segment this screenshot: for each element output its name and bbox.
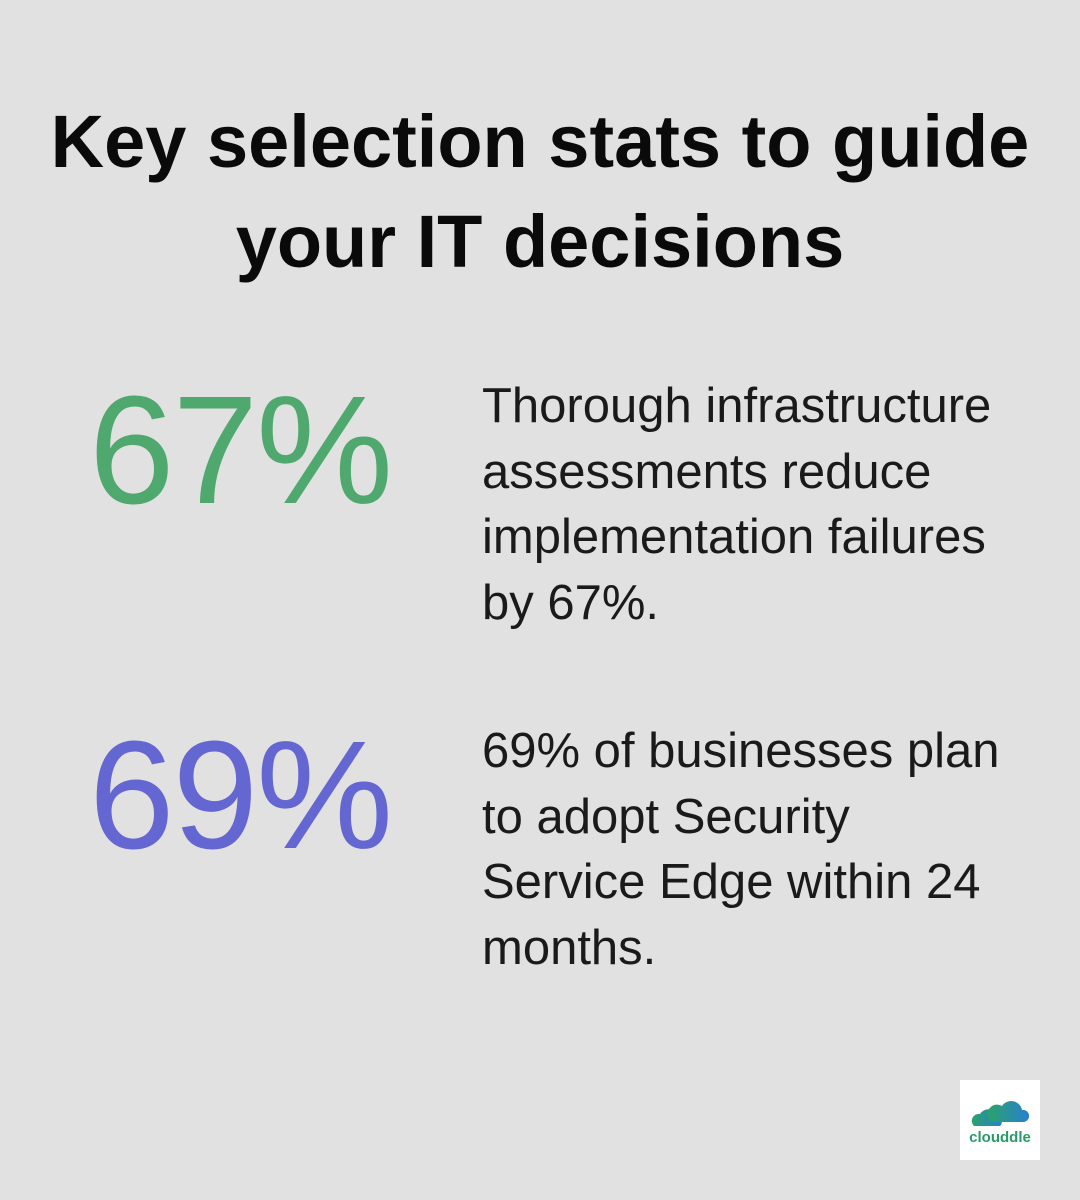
stat text 2: 69% of businesses plan to adopt Security Service Edge within 24 months. [482,724,1000,974]
title [51,100,1029,283]
title: your IT decisions [236,200,844,283]
logo: clouddle [960,1080,1040,1160]
logo: clouddle: clouddle [969,1129,1031,1146]
title: Key selection stats to guide [51,100,1029,183]
stat number: 67%: 67% [89,364,391,536]
stat number: 69%: 69% [89,709,391,881]
stat text 1: Thorough infrastructure assessments reduce implementation failures by 67%. [482,379,991,630]
